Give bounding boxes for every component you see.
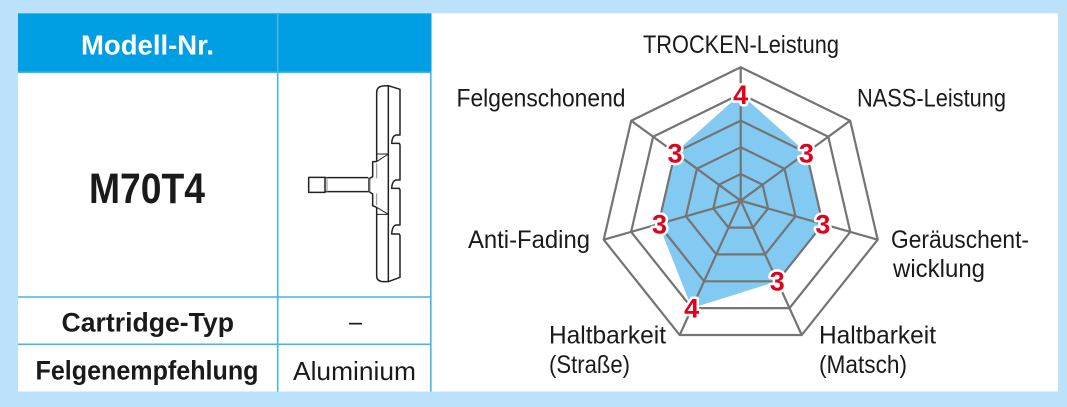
radar scores: 3 <box>652 210 667 240</box>
row label: cartridge type: Cartridge-Typ <box>62 308 234 338</box>
axis label: durability mud: (Matsch) <box>819 351 907 379</box>
axis label: anti-fading: Anti-Fading <box>468 226 590 254</box>
axis label: durability road <box>549 322 666 379</box>
icon: brake pad <box>309 86 400 282</box>
radar scores: 4 <box>733 80 748 110</box>
row value: rim recommendation: Aluminium <box>293 356 416 386</box>
axis label: wet performance: NASS-Leistung <box>857 85 1006 113</box>
axis label: durability mud: Haltbarkeit <box>819 322 936 350</box>
radar scores: 4 <box>684 294 699 324</box>
axis label: noise <box>891 226 1029 283</box>
radar scores: 3 <box>770 266 785 296</box>
axis label: rim friendly: Felgenschonend <box>456 85 626 113</box>
radar chart <box>456 31 1029 379</box>
model name: M70T4 <box>89 165 205 213</box>
row value: cartridge type: – <box>349 308 362 336</box>
axis label: durability mud <box>819 322 936 379</box>
axis label: durability road: Haltbarkeit <box>549 322 666 350</box>
panel: specification table <box>18 13 432 392</box>
radar scores: 3 <box>815 210 830 240</box>
axis label: durability road: (Straße) <box>549 351 630 379</box>
table header band <box>18 13 432 72</box>
row label: rim recommendation: Felgenempfehlung <box>36 356 258 386</box>
axis label: noise: Geräuschent- <box>891 226 1029 254</box>
heading: model number: Modell-Nr. <box>81 30 214 60</box>
axis label: noise: wicklung <box>892 255 985 283</box>
axis label: dry performance: TROCKEN-Leistung <box>643 31 839 59</box>
radar scores: 3 <box>667 138 683 168</box>
radar data area <box>658 94 823 308</box>
radar scores: 3 <box>799 138 814 168</box>
radar scores <box>652 80 830 324</box>
